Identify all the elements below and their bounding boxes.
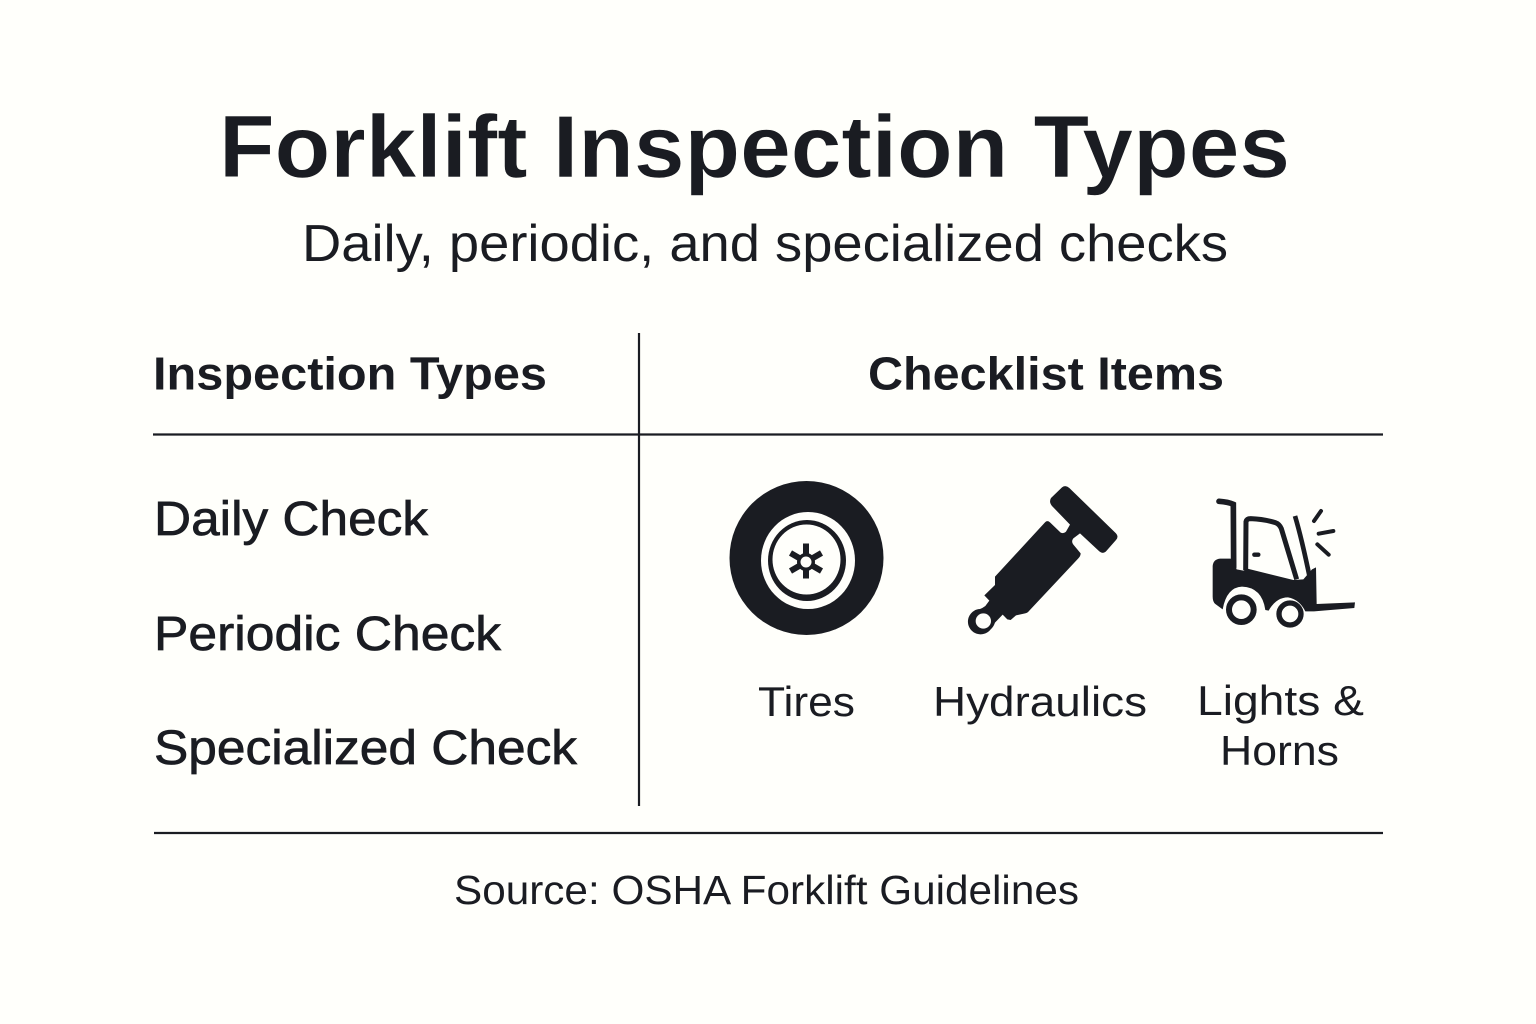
icon: forklift with lights <box>1213 501 1355 625</box>
front upright <box>1295 516 1310 579</box>
rear wheel <box>1229 597 1254 622</box>
label: lights and horns: Lights & <box>1197 677 1364 724</box>
body <box>1213 559 1355 611</box>
column heading: checklist items: Checklist Items <box>868 348 1224 400</box>
subtitle: Daily, periodic, and specialized checks <box>302 215 1228 273</box>
label: hydraulics: Hydraulics <box>933 678 1147 725</box>
label: tires: Tires <box>758 678 855 725</box>
cab handle <box>1254 548 1258 561</box>
periodic check: Periodic Check <box>154 608 502 661</box>
source note: Source: OSHA Forklift Guidelines <box>454 867 1079 913</box>
front wheel <box>1279 603 1301 625</box>
daily check: Daily Check <box>154 493 429 546</box>
light rays <box>1314 511 1333 555</box>
inspection type list <box>154 493 578 775</box>
cab <box>1246 519 1297 579</box>
title: Forklift Inspection Types <box>219 97 1290 196</box>
label: lights and horns: Horns <box>1220 727 1339 774</box>
label: lights and horns <box>1197 677 1364 774</box>
mast <box>1219 501 1234 567</box>
specialized check: Specialized Check <box>154 722 578 775</box>
icon: hydraulic cylinder <box>968 486 1117 634</box>
column heading: inspection types: Inspection Types <box>153 348 547 400</box>
icon: tire <box>730 481 884 635</box>
